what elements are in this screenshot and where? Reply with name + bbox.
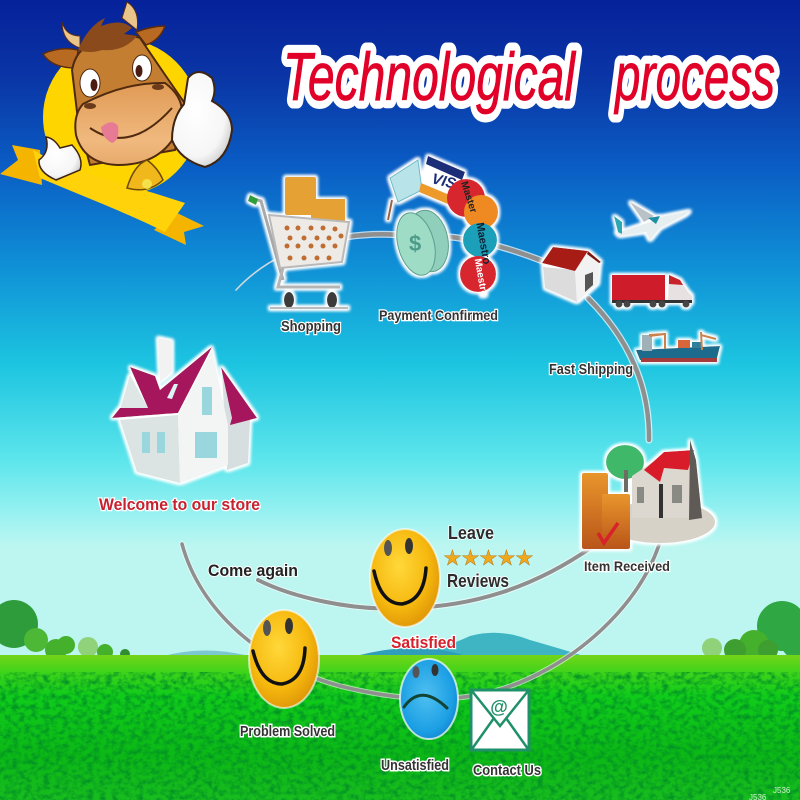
five star rating: ★ [461,547,480,570]
head [72,35,186,165]
smiley: problem solved [249,610,319,708]
ribbon banner [0,145,204,245]
muzzle [75,83,182,165]
label: fast shipping: Fast Shipping [549,361,633,378]
tree [606,445,644,479]
smiley: satisfied [370,529,440,627]
five star rating: ★ [497,547,516,570]
label: payment confirmed: Payment Confirmed [379,307,498,323]
label: reviews: Reviews [447,571,509,591]
step: payment confirmed with cards and coin: Maestro [473,222,493,266]
watermark [749,786,791,800]
step: warehouse house [542,247,601,302]
tongue [101,122,118,143]
label: unsatisfied: Unsatisfied [381,757,449,774]
background scenery: hills, trees and grass [0,600,800,800]
icon: store house [112,338,257,483]
label: come again: Come again [208,561,298,580]
yellow circle [43,39,199,195]
coin stack [403,207,453,275]
label: contact us: Contact Us [473,762,541,779]
card discs [447,179,485,217]
step: payment confirmed with cards and coin: Maestro [472,258,489,297]
chimney [158,338,172,382]
step: payment confirmed with cards and coin: VISA [430,170,468,195]
main roof [112,347,212,418]
house [632,456,696,518]
visa card [420,156,465,204]
step: payment confirmed with cards and coin [388,156,498,297]
hair tuft [78,18,137,52]
title: Technological [283,39,576,115]
watermark: J536 [773,786,791,795]
label: problem solved: Problem Solved [240,723,335,740]
icon: envelope contact [471,690,529,750]
step: payment confirmed with cards and coin: Master [458,180,479,214]
label: leave: Leave [448,523,494,543]
left wall [120,415,180,483]
label: shopping: Shopping [281,318,341,335]
label: satisfied: Satisfied [391,633,456,652]
five star rating [443,547,534,570]
thumbs up glove [172,72,232,167]
five star rating: ★ [479,547,498,570]
mascot: cow with thumbs up on ribbon [0,2,232,245]
left gable [120,375,148,410]
bell [127,160,163,190]
step: shopping cart [248,177,349,309]
step: payment confirmed with cards and coin: $ [409,231,421,256]
bank card [390,160,422,202]
basket [269,215,349,268]
icon: container ship [636,332,720,362]
icon: red truck [612,275,692,308]
ears and horns [43,49,78,68]
small hand [39,137,81,180]
label: item received: Item Received [584,558,670,574]
right roof [221,367,257,425]
eyes [80,69,100,97]
step: item received [582,440,715,549]
right wing wall [222,370,250,470]
base disc [605,501,715,543]
icon: airplane [614,202,690,240]
front gable wall [178,350,228,483]
process flow curves [182,234,659,699]
five star rating: ★ [443,547,462,570]
parcels [285,177,316,215]
icon: envelope contact: @ [490,697,508,717]
label: welcome to our store: Welcome to our store [99,495,260,514]
smiley: unsatisfied [400,659,458,739]
title: Technological [283,39,576,115]
boxes [582,473,608,549]
five star rating: ★ [515,547,534,570]
